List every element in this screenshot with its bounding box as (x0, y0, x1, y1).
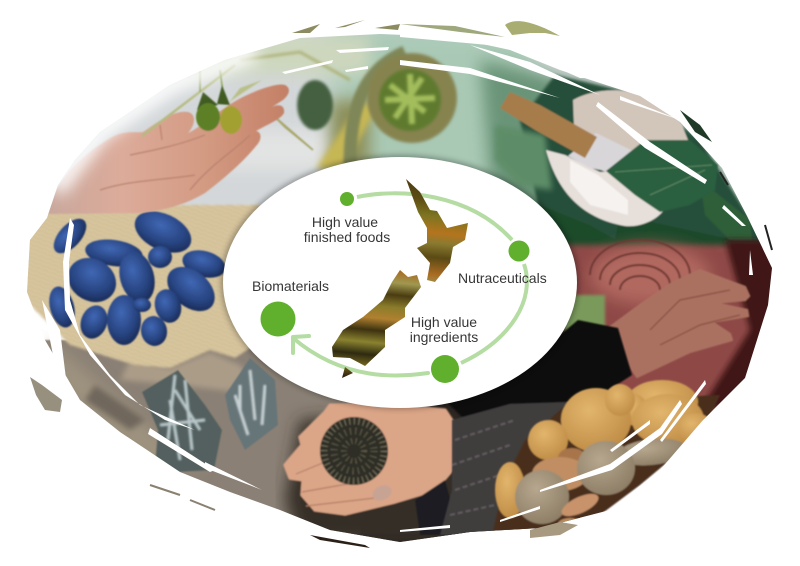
label: high value ingredients: High value (411, 314, 477, 330)
node: nutraceuticals (508, 240, 530, 262)
kawakawa leaf (606, 140, 718, 212)
brush strokes: white scratches over photos (42, 30, 753, 532)
label: high value finished foods: finished foods (304, 229, 390, 245)
label: high value ingredients: ingredients (410, 329, 478, 345)
panel: sea urchin in hands (285, 404, 470, 545)
cycle arc: top (357, 193, 512, 240)
blue potatoes (45, 203, 229, 348)
node: biomaterials (260, 302, 296, 336)
panel: woven bag and black sleeve (440, 320, 632, 535)
panel: rock and seaweed (44, 338, 360, 536)
panel: bush background with fern (28, 34, 772, 280)
label: biomaterials: Biomaterials (252, 278, 329, 294)
seaweed bundles (142, 358, 278, 472)
value chain cycle (260, 192, 530, 383)
fruit and stem (142, 65, 262, 136)
node: ingredients (431, 355, 459, 383)
central white oval (223, 157, 577, 408)
cycle arrow to biomaterials (293, 336, 428, 376)
panel: carved red wood with hand (565, 240, 790, 420)
South Island (332, 270, 421, 366)
label: high value finished foods: High value (312, 214, 378, 230)
Stewart Island (342, 367, 353, 378)
panel: hand holding fruit (45, 65, 289, 214)
label: nutraceuticals: Nutraceuticals (458, 270, 547, 286)
hand on carving (606, 270, 749, 377)
cycle arc: right (461, 264, 527, 363)
panel: dark base behind lower photos (350, 326, 580, 542)
fern koru (350, 52, 457, 165)
North Island (406, 179, 468, 282)
node: finished foods (340, 192, 354, 206)
blurred fruit (297, 80, 333, 130)
feathered top-left edge (55, 52, 255, 190)
panel: heirloom potatoes (492, 380, 720, 535)
central oval shadow (221, 155, 579, 409)
mortar bowl (500, 90, 692, 226)
panel: woven mat with blue potatoes (20, 203, 262, 368)
panel: leaves and mortar with bone toki (480, 60, 770, 262)
map of New Zealand (332, 179, 468, 378)
urchin (320, 417, 388, 485)
